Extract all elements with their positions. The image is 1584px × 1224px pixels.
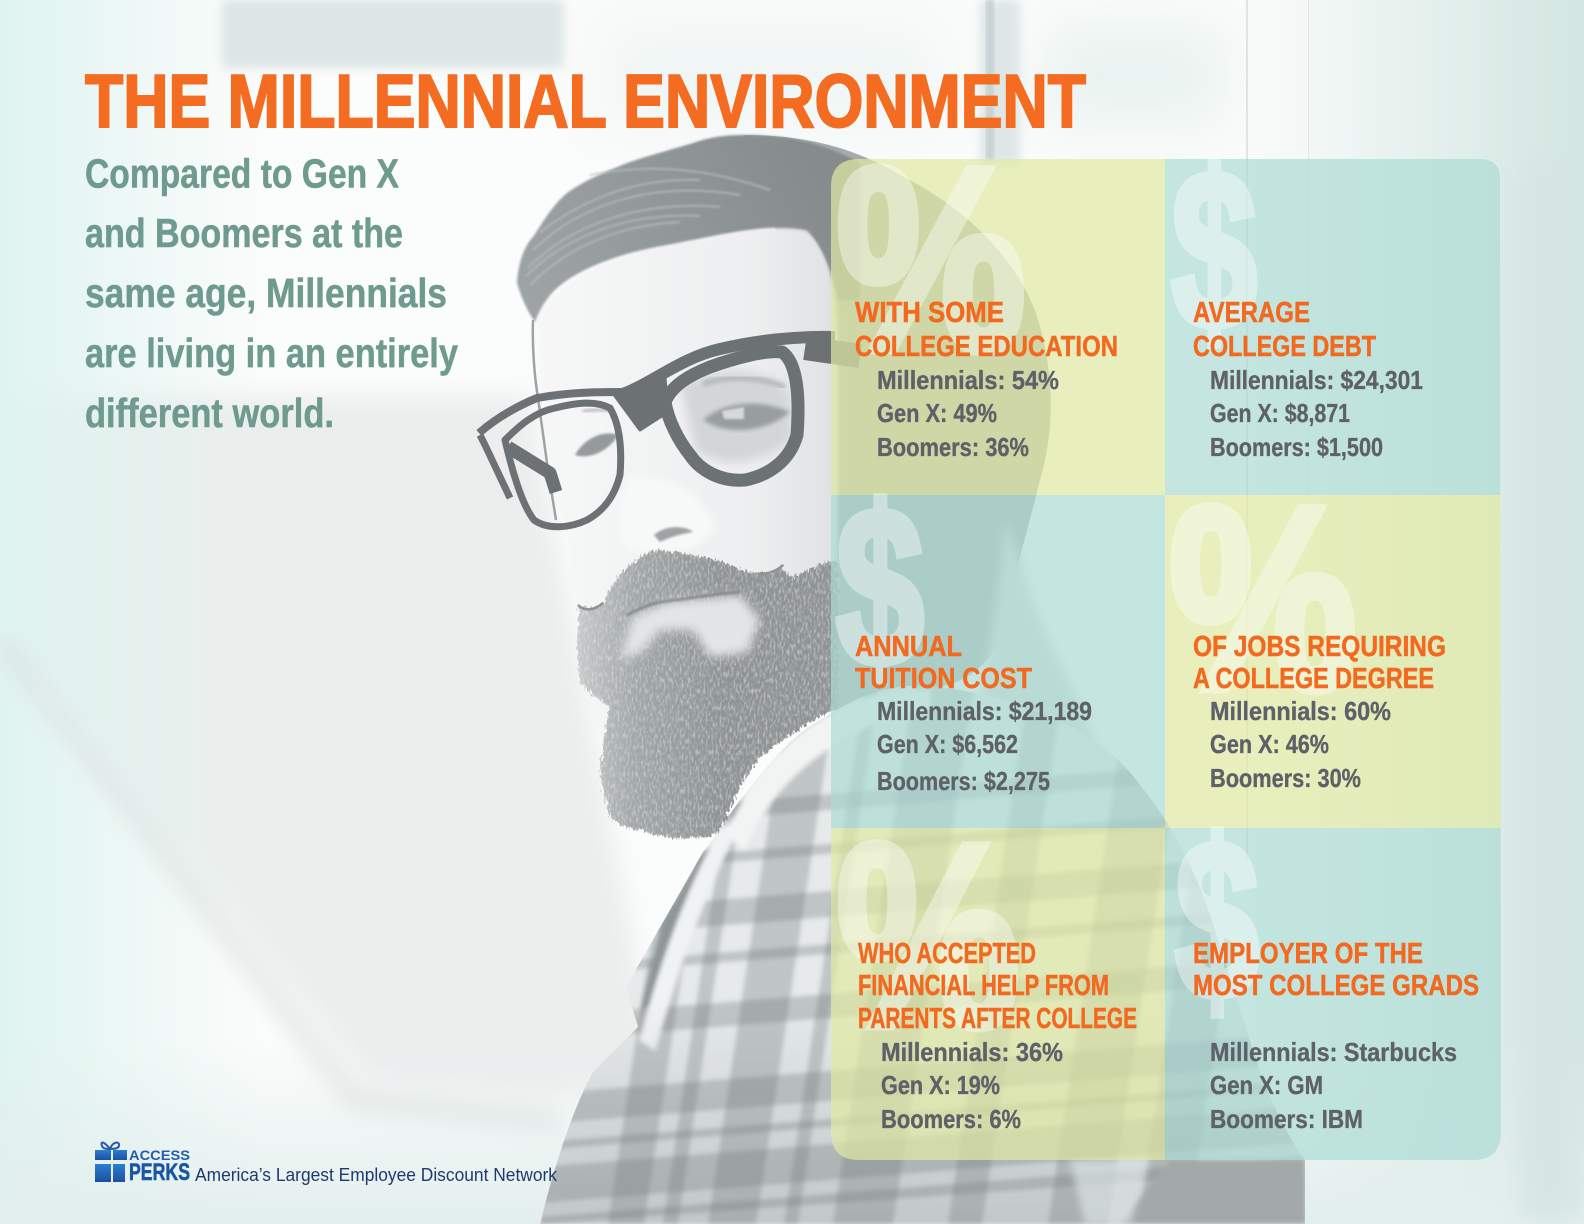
logo: Access Perks: PERKS [129,1159,190,1186]
stat: employer of most college grads: EMPLOYER OF THE [1193,938,1423,970]
intro text: same age, Millennials [85,270,447,316]
stat: annual tuition cost: Millennials: $21,189 [877,696,1092,726]
nose shading [618,475,715,554]
stat: financial help from parents: WHO ACCEPTED [858,938,1036,970]
face skin [535,228,838,830]
stat: jobs requiring a college degree: Millennials: 60% [1210,696,1391,726]
stat: jobs requiring a college degree [1193,631,1446,793]
stat: annual tuition cost: Gen X: $6,562 [877,729,1018,759]
panel: statistics grid [831,113,1501,1160]
stat: some college education [855,297,1118,462]
glasses [479,337,860,527]
icon: gift box [95,1143,127,1182]
stat: some college education: Millennials: 54% [877,365,1059,395]
icon: dollar sign 1: $ [1171,123,1257,376]
icon: percent sign 2: % [1169,452,1357,745]
panel: financial help from parents [831,828,1165,1160]
neck shade [980,520,1100,760]
stat: annual tuition cost: TUITION COST [855,663,1032,695]
stat: jobs requiring a college degree: Boomers: 30% [1210,763,1361,793]
intro text: different world. [85,390,334,436]
stat: employer of most college grads: Gen X: GM [1210,1070,1323,1100]
stat: financial help from parents: Millennials: 36% [881,1037,1063,1067]
panel: employer of most grads [1165,828,1501,1160]
panel: annual tuition cost [831,495,1165,828]
stat: jobs requiring a college degree: Gen X: 46% [1210,729,1329,759]
icon: percent sign 1: % [836,113,1026,406]
stat: financial help from parents [858,938,1137,1134]
intro text: and Boomers at the [85,210,403,256]
stat: average college debt: Gen X: $8,871 [1210,398,1350,428]
panel: average college debt [1165,159,1501,495]
icon: percent sign 3: % [836,789,1020,1082]
title: THE MILLENNIAL ENVIRONMENT [85,59,1086,143]
panel: jobs requiring a degree [1165,495,1501,828]
stat: jobs requiring a college degree: A COLLEGE DEGREE [1193,663,1434,695]
stat: employer of most college grads: Boomers: IBM [1210,1104,1363,1134]
nostril [654,527,693,542]
panel: some college education [831,159,1165,495]
stat: some college education: WITH SOME [855,297,1004,329]
hair [517,135,860,322]
stat: some college education: COLLEGE EDUCATION [855,331,1118,363]
tagline: America’s Largest Employee Discount Network [195,1165,558,1185]
intro text: Compared to Gen X [85,150,399,196]
stat: annual tuition cost: Boomers: $2,275 [877,766,1050,796]
intro text [85,150,458,436]
icon: dollar sign 3: $ [1175,793,1259,1046]
stat: financial help from parents: Gen X: 19% [881,1070,1000,1100]
stat: jobs requiring a college degree: OF JOBS REQUIRING [1193,631,1446,663]
stat: average college debt: AVERAGE [1193,297,1310,329]
beard and mustache [577,550,838,838]
stat: employer of most college grads: Millennials: Starbucks [1210,1037,1457,1067]
head back and neck [743,135,1051,720]
stat: average college debt: Millennials: $24,301 [1210,365,1423,395]
hair strands [526,169,770,285]
sideburn and face edge [533,320,556,520]
stat: financial help from parents: FINANCIAL HELP FROM [858,970,1109,1002]
left eye [575,409,618,456]
right eye [703,378,790,430]
stat: financial help from parents: PARENTS AFTER COLLEGE [858,1003,1137,1035]
stat: average college debt: Boomers: $1,500 [1210,432,1383,462]
stat: annual tuition cost [855,631,1092,796]
intro text: are living in an entirely [85,330,458,376]
logo: Access Perks: ACCESS [129,1147,190,1163]
eye socket shading [680,371,792,462]
lips and chin highlight [620,595,760,660]
stat: financial help from parents: Boomers: 6% [881,1104,1021,1134]
icon: dollar sign 2: $ [836,460,924,713]
photo: bearded man with glasses [479,135,1330,1224]
stat: average college debt [1193,297,1423,462]
stat: some college education: Gen X: 49% [877,398,997,428]
stat: employer of most college grads: MOST COLLEGE GRADS [1193,970,1479,1002]
logo: Access Perks [95,1143,190,1186]
shirt plaid [530,680,1330,1224]
stat: annual tuition cost: ANNUAL [855,631,962,663]
stat: some college education: Boomers: 36% [877,432,1029,462]
mustache tips [578,565,783,609]
stat: average college debt: COLLEGE DEBT [1193,331,1376,363]
stat: employer of most college grads [1193,938,1479,1134]
